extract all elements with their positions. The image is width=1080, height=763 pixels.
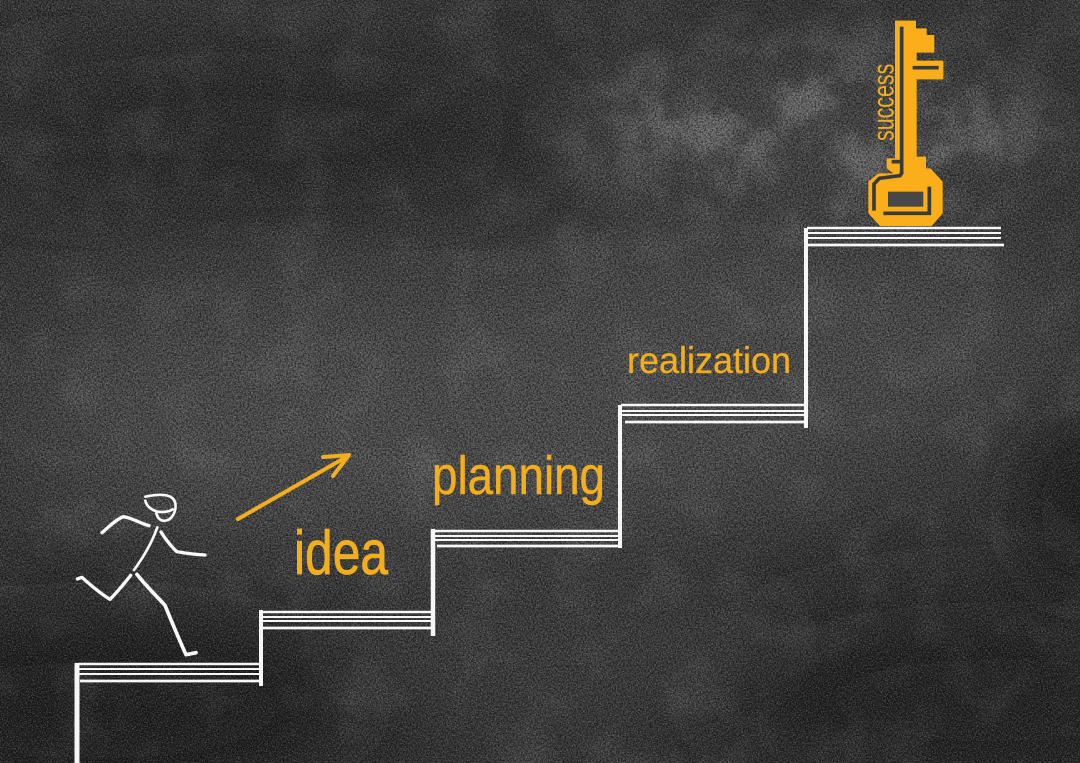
step 1 bbox=[77, 663, 262, 763]
label: planning: planning bbox=[432, 446, 605, 506]
label: idea: idea bbox=[294, 519, 388, 588]
running stick figure bbox=[77, 495, 205, 655]
key body bbox=[868, 21, 943, 226]
back arm bbox=[102, 517, 149, 533]
head bbox=[145, 495, 176, 521]
label: realization: realization bbox=[627, 340, 791, 381]
icon: golden key bbox=[867, 21, 943, 226]
step 3 bbox=[433, 529, 621, 636]
step 5 bbox=[806, 228, 1004, 428]
chalk staircase bbox=[77, 228, 1004, 763]
torso bbox=[134, 527, 157, 570]
step 2 bbox=[261, 610, 433, 686]
back leg bbox=[77, 575, 131, 599]
front arm bbox=[161, 532, 205, 555]
key window bbox=[888, 192, 923, 207]
word on key: success: success bbox=[867, 64, 900, 141]
step 4 bbox=[620, 405, 808, 548]
key cut-outs bbox=[874, 27, 939, 213]
front leg bbox=[137, 574, 196, 655]
arrow pointing up the stairs bbox=[238, 455, 349, 519]
